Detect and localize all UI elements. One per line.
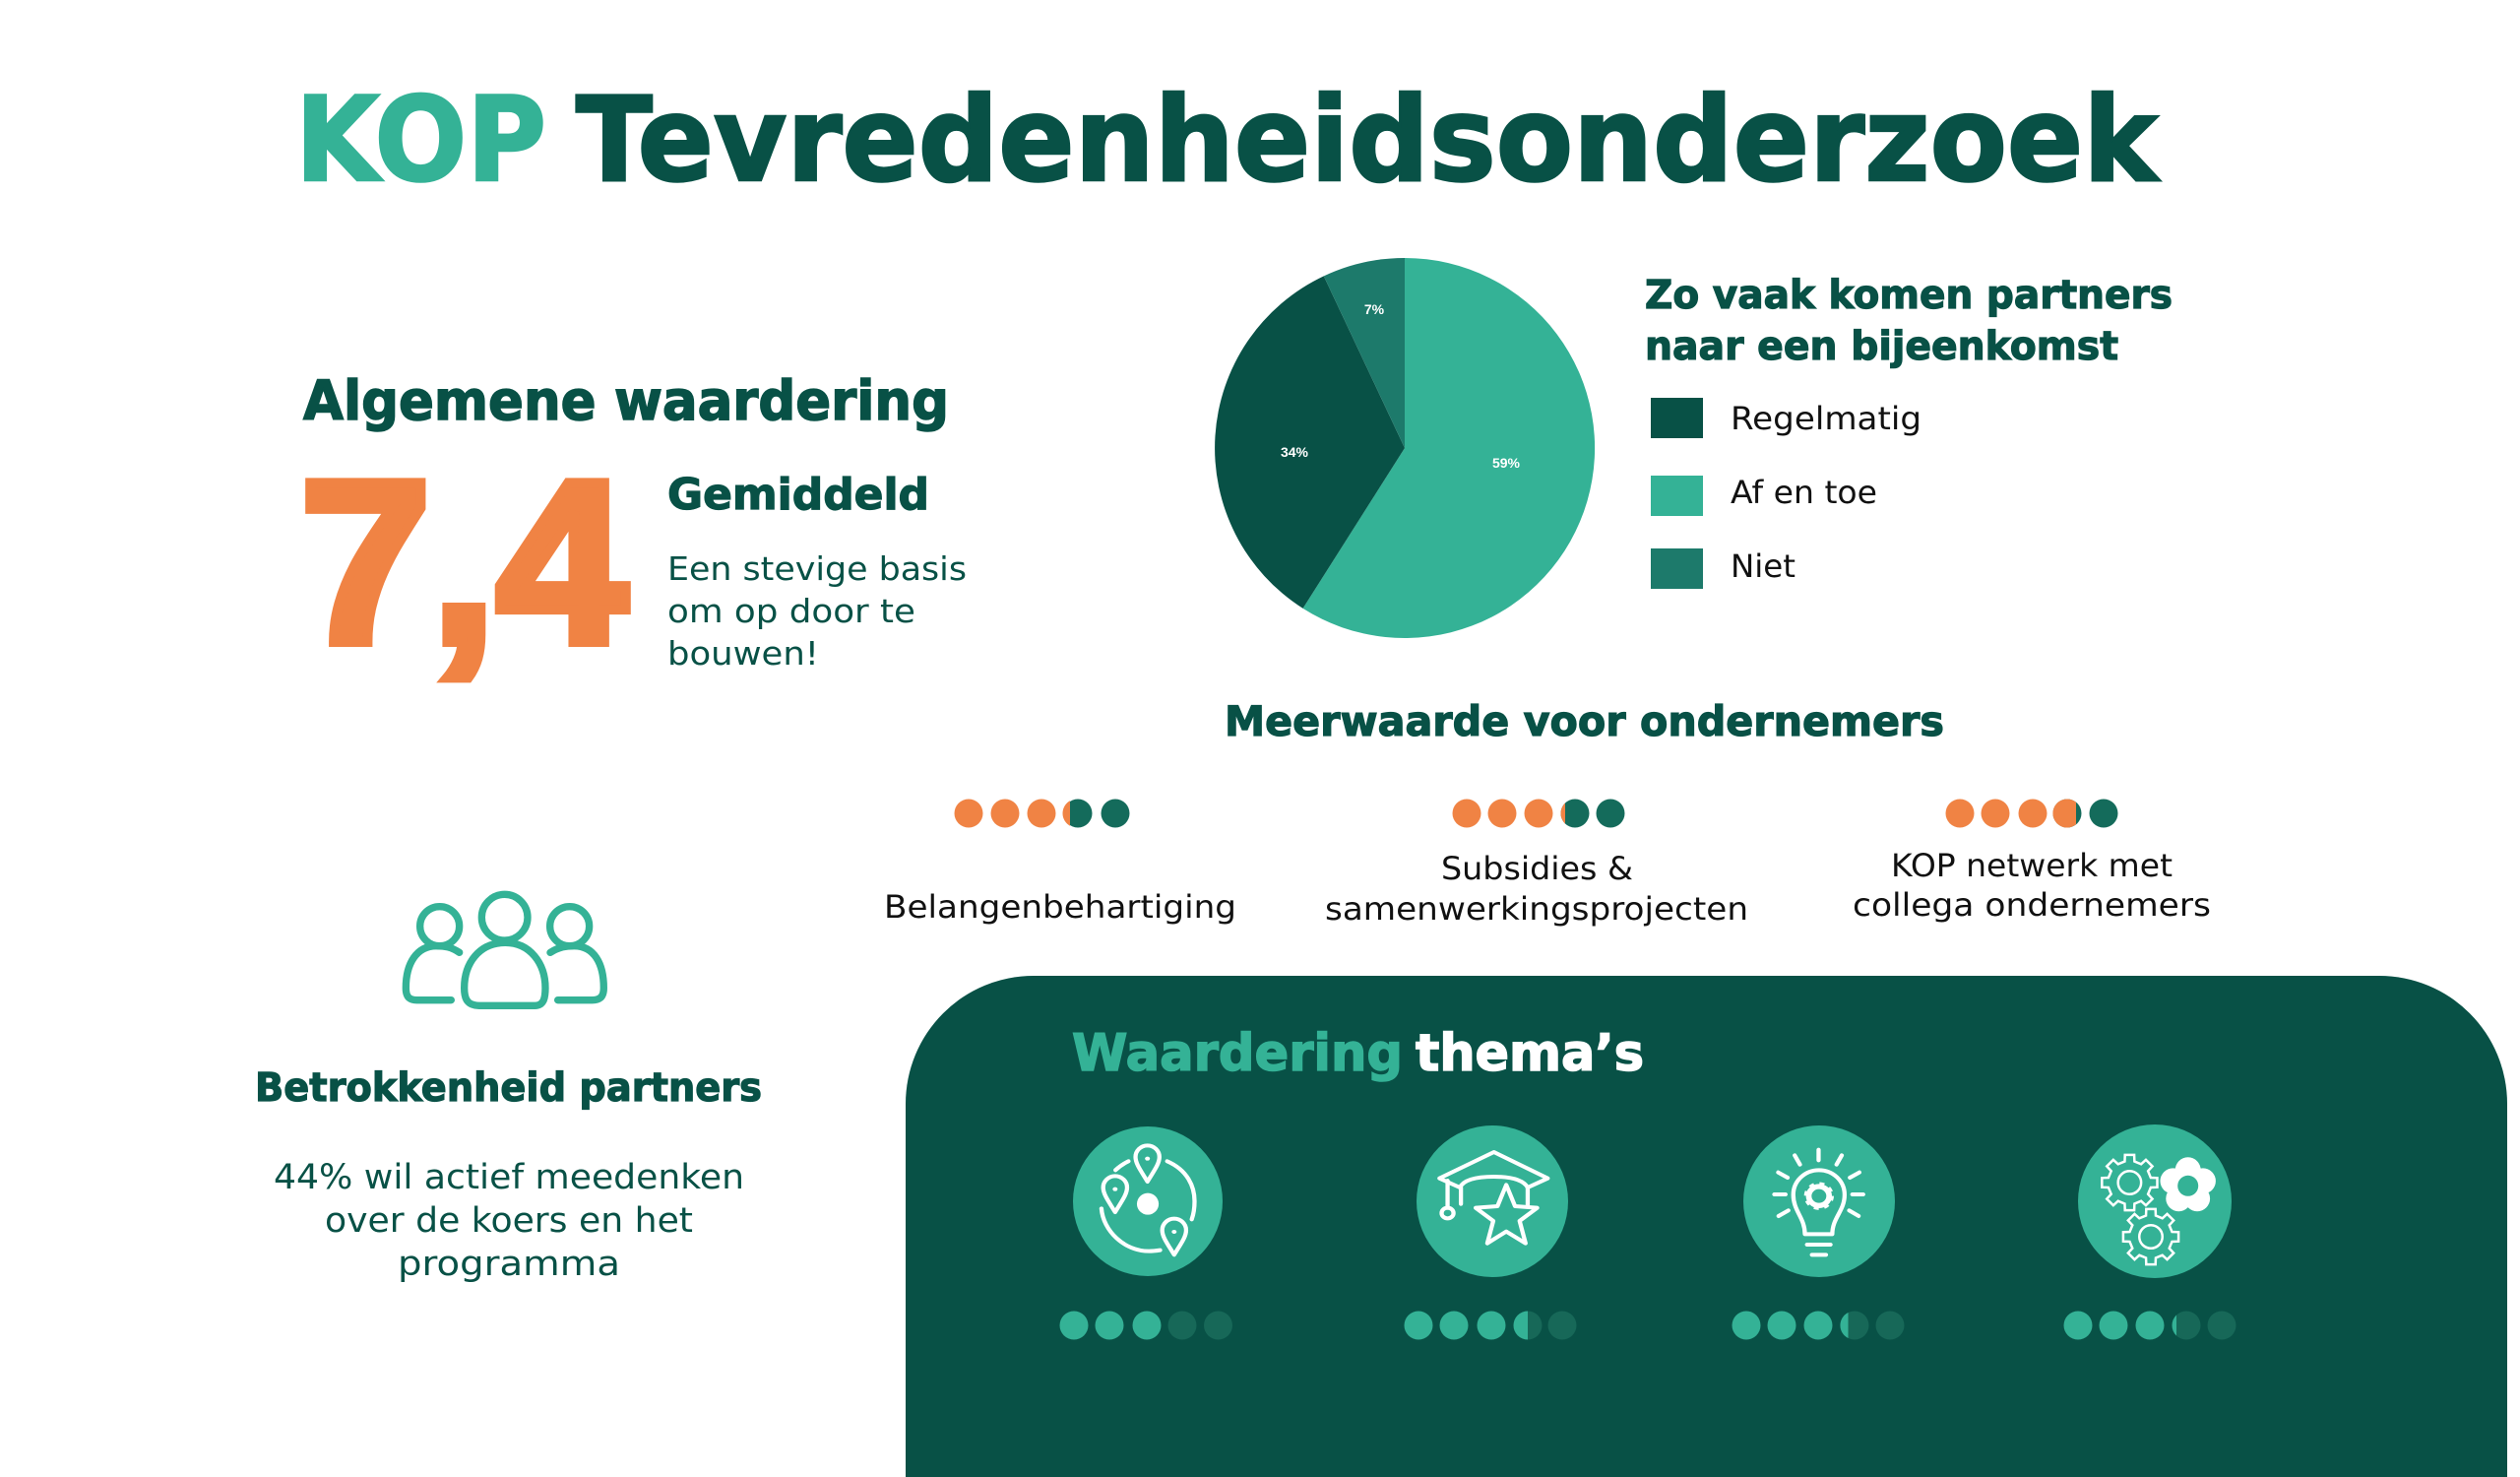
pie chart: 7%	[1364, 301, 1385, 317]
icon: graduation cap and star	[1417, 1125, 1568, 1277]
rating dots: belangenbehartiging	[955, 800, 1130, 827]
legend: Af en toe	[1731, 474, 1877, 511]
title: Tevredenheidsonderzoek	[576, 73, 2161, 209]
title: KOP	[295, 73, 546, 209]
score description: bouwen!	[667, 634, 819, 673]
rating dots: subsidies	[1453, 800, 1624, 827]
label: subsidies: samenwerkingsprojecten	[1325, 890, 1748, 928]
legend	[1651, 398, 1922, 589]
heading: waardering thema's	[1072, 1024, 1644, 1083]
panel: waardering thema's	[906, 976, 2507, 1477]
icon: light bulb	[1743, 1125, 1895, 1277]
pie chart	[1215, 258, 1595, 638]
heading: algemene waardering: Algemene waardering	[303, 369, 949, 432]
score description	[667, 549, 967, 673]
heading: waardering thema's: thema’s	[1416, 1024, 1644, 1083]
icon: gears and flower	[2078, 1124, 2232, 1278]
pie chart: 59%	[1492, 455, 1521, 471]
legend heading: Zo vaak komen partners	[1645, 273, 2173, 318]
big score: 7,4	[300, 432, 627, 691]
subheading: gemiddeld: Gemiddeld	[667, 470, 929, 520]
panel: algemene waardering	[300, 369, 967, 691]
legend heading	[1645, 273, 2173, 369]
pie chart: 34%	[1281, 444, 1309, 460]
text: betrokkenheid: over de koers en het	[325, 1201, 693, 1241]
text: betrokkenheid: 44% wil actief meedenken	[274, 1158, 744, 1197]
text: betrokkenheid: programma	[398, 1245, 620, 1284]
rating dots: theme 3	[1732, 1312, 1904, 1339]
heading: betrokkenheid partners: Betrokkenheid partners	[255, 1065, 762, 1111]
legend: Niet	[1731, 547, 1796, 585]
label: kop netwerk	[1853, 847, 2211, 924]
label: kop netwerk: collega ondernemers	[1853, 886, 2211, 924]
label: subsidies: Subsidies &	[1441, 850, 1633, 887]
icon: locations	[1073, 1126, 1223, 1276]
icon: people	[406, 894, 603, 1005]
heading: meerwaarde: Meerwaarde voor ondernemers	[1225, 697, 1944, 745]
rating dots: theme 4	[2063, 1312, 2236, 1339]
label: belangenbehartiging: Belangenbehartiging	[884, 888, 1236, 926]
score description: Een stevige basis	[667, 549, 967, 588]
score description: om op door te	[667, 592, 915, 630]
label: subsidies	[1325, 850, 1748, 928]
heading: waardering thema's: Waardering	[1072, 1024, 1403, 1083]
rating dots: theme 1	[1059, 1312, 1232, 1339]
rating dots: kop netwerk	[1945, 800, 2118, 827]
legend: Regelmatig	[1731, 400, 1922, 437]
legend heading: naar een bijeenkomst	[1645, 324, 2118, 369]
rating dots: theme 2	[1404, 1312, 1577, 1339]
text: betrokkenheid	[274, 1158, 744, 1284]
label: kop netwerk: KOP netwerk met	[1891, 847, 2173, 884]
